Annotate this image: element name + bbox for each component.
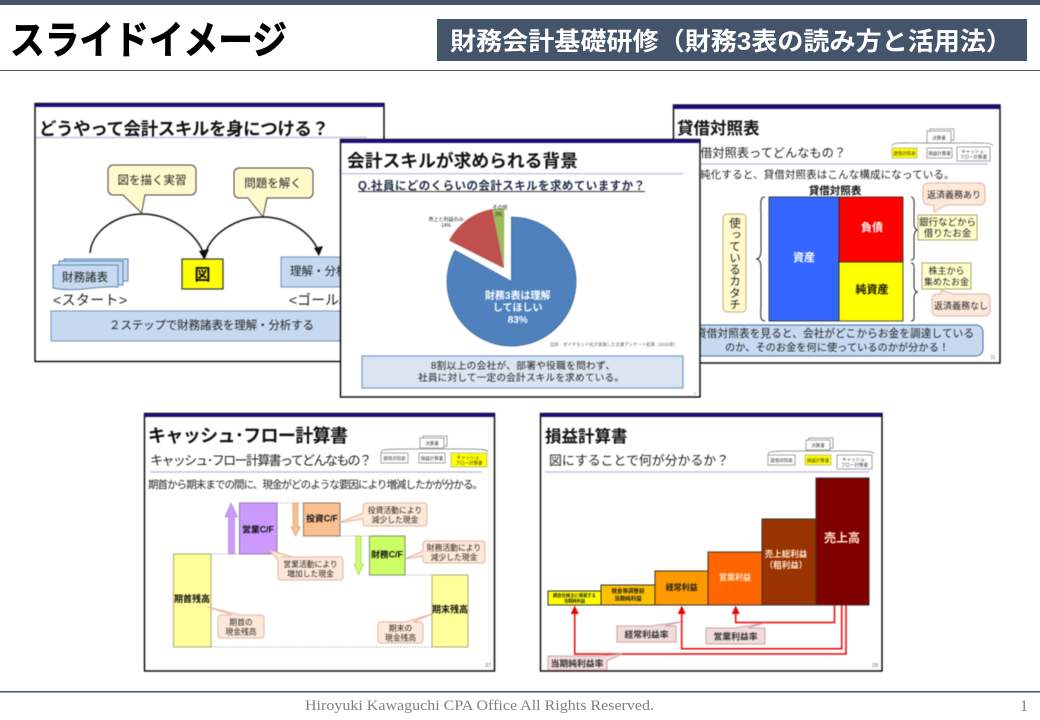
source note: 出所：ダイヤモンド社が実施した企業アンケート結果（2010年） [550,341,678,348]
page number: 11 [990,355,996,361]
subtitle: キャッシュ･フロー計算書ってどんなもの？ [150,453,372,468]
mini statements diagram: 貸借対照表 [383,455,406,462]
step: ordinary profit [655,571,708,605]
note: borrowed from banks [918,215,977,240]
mini statements diagram: 決算書 [811,442,825,449]
note: borrowed from banks: 銀行などから [919,216,976,228]
panel: slide income statement [540,414,882,671]
callout: operating: 営業活動により [283,559,338,569]
intro text: 単純化すると、貸借対照表はこんな構成になっている。 [690,168,954,181]
pie chart: 83% [508,315,528,326]
balance sheet chart [769,197,903,321]
arrow: operating margin [732,605,834,622]
mini statements diagram [892,129,993,161]
step chart [548,478,869,605]
slide number: 1 [1020,698,1028,715]
description: 期首から期末までの間に、現金がどのような要因により増減したかが分かる。 [148,478,483,491]
upper right brace [911,197,918,260]
yellow diagram box: 図 [194,267,211,284]
callout: financing: 財務活動により [427,542,481,552]
step: pre-tax income: 税金等調整前 [611,587,645,595]
pie chart [428,204,576,346]
panel: slide background of accounting skills [340,140,700,397]
label: net profit margin [548,654,622,670]
mini statements diagram: キャッシュ･ [842,457,867,462]
step: ordinary profit: 経常利益 [666,582,698,592]
label: operating profit margin [706,623,765,644]
conclusion box: 8割以上の会社が、部署や役職を問わず、 [431,359,615,372]
step: net income attributable: 当期純利益 [564,598,586,604]
label: ordinary profit margin [617,622,681,642]
callout: no repayment: 返済義務なし [934,300,988,311]
step: pre-tax income [601,585,655,605]
summary box: のか、そのお金を何に使っているのかが分かる！ [725,341,949,354]
pie chart: その他 [492,204,508,211]
panel: slide how to learn accounting skills [35,104,384,362]
callout: closing cash [378,614,432,643]
note: borrowed from banks: 借りたお金 [924,228,972,240]
arrow: start to diagram [90,214,209,260]
mini statements diagram: 決算書 [932,134,946,142]
balance sheet chart: 純資産 [856,282,888,296]
page number: 5 [694,391,697,396]
callout: opening cash [208,607,264,638]
callout: operating [269,550,343,580]
arrow: diagram to goal [205,217,323,256]
callout: investing [338,503,427,526]
yellow diagram box [182,259,223,289]
slide title: 貸借対照表 [677,118,760,138]
page number: 28 [872,663,878,669]
callout: solve problems: 問題を解く [244,176,302,190]
slide title: キャッシュ･フロー計算書 [148,425,348,446]
slide title: 損益計算書 [545,426,628,446]
step: gross profit: （粗利益） [765,560,807,570]
callout: drawing practice [108,165,196,213]
bar: operating CF: 営業C/F [242,524,275,534]
mini statements diagram [381,436,488,467]
callout: opening cash: 期首の [229,617,253,627]
pie chart: 14% [441,223,452,229]
mini statements diagram: 貸借対照表 [770,457,793,464]
callout: drawing practice: 図を描く実習 [118,173,186,187]
mini statements diagram: フロー計算書 [456,460,483,466]
step: net income attributable [548,591,601,605]
bar: financing CF: 財務C/F [371,548,404,560]
mini statements diagram: 決算書 [425,440,439,447]
mini statements diagram: キャッシュ･ [457,455,481,460]
step: gross profit [762,519,816,605]
pie chart: してほしい [493,302,543,314]
heading banner [437,19,1027,61]
question: Q.社員にどのくらいの会計スキルを求めていますか？ [358,178,645,192]
step: sales [816,478,869,605]
bar: financing CF [370,536,405,575]
subtitle: 図にすることで何が分かるか？ [549,453,729,468]
bar: investing CF: 投資C/F [306,512,339,524]
bar: opening balance: 期首残高 [174,593,210,604]
callout: operating: 増加した現金 [287,568,334,578]
arrow: ordinary margin [678,605,842,649]
step: pre-tax income: 当期純利益 [614,594,642,602]
callout: solve problems [234,168,313,217]
arrow: increase [225,503,238,554]
slide title: どうやって会計スキルを身につける？ [39,119,329,139]
vertical label box [723,214,746,312]
callout: closing cash: 期末の [389,623,412,633]
summary box [688,325,983,356]
mini statements diagram: 損益計算書 [928,150,951,157]
bar: closing balance: 期末残高 [432,604,468,614]
panel: slide balance sheet [674,105,1000,363]
arrow: investing decrease [291,503,300,536]
panel: slide cash flow statement [144,414,494,671]
callout: financing [405,541,485,563]
page number: 37 [485,663,491,669]
conclusion box [362,356,683,388]
summary bar: ２ステップで財務諸表を理解・分析する [109,318,314,332]
bar: investing CF [304,503,340,536]
title: スライドイメージ [10,20,287,63]
slide title: 会計スキルが求められる背景 [347,150,578,171]
note: collected from shareholders: 株主から [928,265,965,276]
mini statements diagram: キャッシュ･ [961,149,986,154]
step: gross profit: 売上総利益 [765,549,808,559]
label: operating profit margin: 営業利益率 [714,630,758,642]
callout: repayment required: 返済義務あり [927,189,981,200]
step: operating profit [708,552,762,605]
chart heading: 貸借対照表 [809,184,862,197]
mini statements diagram: 損益計算書 [421,455,444,462]
pie chart: 3% [495,212,503,218]
vertical label box: 使っているカタチ [728,216,741,310]
mini statements diagram [768,438,874,469]
goal box: 理解・分析 [290,264,348,278]
callout: financing: 減少した現金 [431,552,478,562]
heading banner: 財務会計基礎研修（財務3表の読み方と活用法） [450,28,1012,56]
pie chart: 財務3表は理解 [485,289,550,302]
bar: closing balance [432,575,468,647]
label: ordinary profit margin: 経常利益率 [624,628,669,640]
summary bar [51,311,367,341]
summary box: 貸借対照表を見ると、会社がどこからお金を調達している [696,327,974,340]
callout: repayment required [923,183,985,212]
callout: closing cash: 現金残高 [385,632,416,642]
label: net profit margin: 当期純利益率 [551,658,604,668]
bar: operating CF [240,503,277,554]
step: operating profit: 営業利益 [719,572,751,582]
callout: investing: 減少した現金 [372,514,419,524]
left brace [756,197,765,321]
callout: opening cash: 現金残高 [225,626,257,636]
mini statements diagram: フロー計算書 [841,462,868,468]
lower right brace [911,263,918,321]
mini statements diagram: フロー計算書 [960,154,987,160]
balance sheet chart: 負債 [861,220,883,234]
balance sheet chart: 資産 [793,250,815,264]
pie chart: 売上と利益のみ [428,216,464,223]
mini statements diagram: 貸借対照表 [893,150,916,157]
stacked documents: financial statements: 財務諸表 [62,270,108,284]
mini statements diagram: 損益計算書 [807,457,830,464]
stacked documents: financial statements [53,259,128,290]
arrow: net margin [571,605,846,654]
footer copyright: Hiroyuki Kawaguchi CPA Office All Rights Reserved. [305,698,654,714]
step: sales: 売上高 [824,530,860,545]
note: collected from shareholders [922,263,971,289]
subtitle: 貸借対照表ってどんなもの？ [688,145,846,160]
callout: no repayment [932,290,990,316]
goal box [281,257,361,287]
start label: <スタート> [53,292,127,308]
arrow: financing decrease [354,536,364,575]
conclusion box: 社員に対して一定の会計スキルを求めている。 [418,371,624,384]
bar: opening balance [174,554,211,647]
note: collected from shareholders: 集めたお金 [924,276,969,287]
callout: investing: 投資活動により [368,505,422,515]
goal label: <ゴール> [289,292,347,308]
step: net income attributable: 親会社株主に帰属する [553,592,596,599]
